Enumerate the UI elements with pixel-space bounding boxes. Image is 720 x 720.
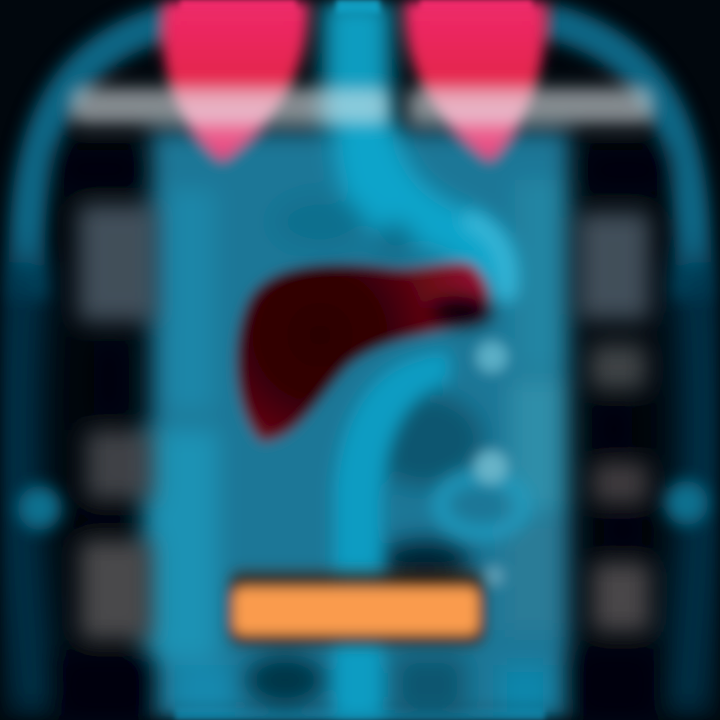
liver [236,262,489,442]
orange callout bar [228,570,486,646]
right column: text blocks [578,212,650,632]
liver dark tip [432,297,492,327]
left column: text blocks [78,204,156,640]
torso [142,130,570,720]
heading band [72,88,652,124]
left lung [162,0,308,162]
highlights [474,341,508,586]
top and bottom edge fill [175,0,545,720]
right column: dark backing [575,150,665,720]
right lung [405,0,546,162]
left column: dark backing [60,150,150,720]
organs: abdominal detail [245,0,524,720]
